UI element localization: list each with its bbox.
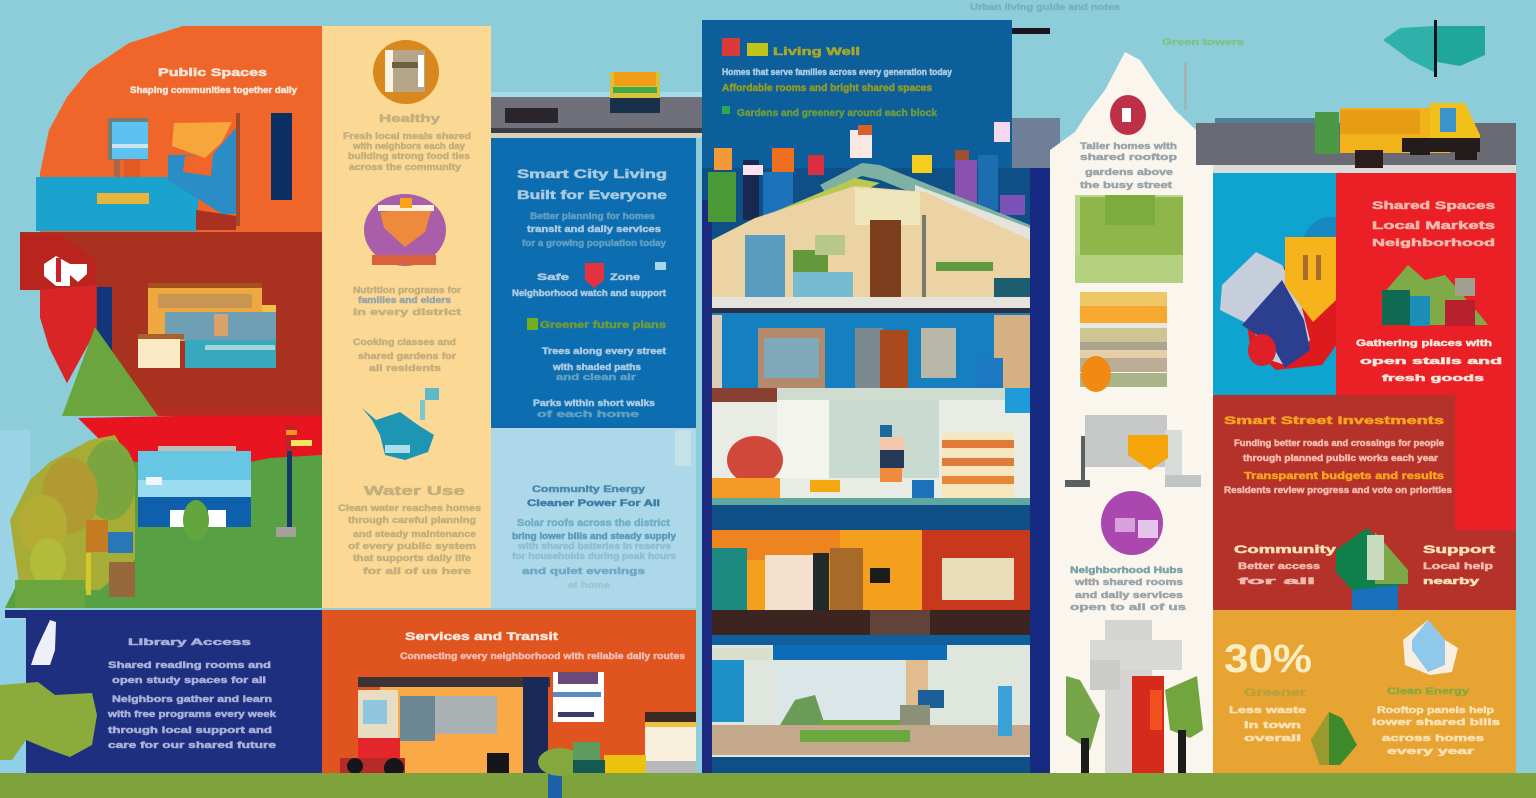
body text: Taller homes with [1080,141,1177,151]
body text: with shared rooms [1074,577,1183,587]
body text [1080,141,1178,190]
body text: open to all of us [1070,602,1186,612]
panel: blue middle [491,138,696,425]
label: left: Better access [1238,561,1320,571]
body text: through planned public works each year [1243,453,1439,463]
scene: garden room [712,635,1030,757]
stat number: 30% [1224,637,1312,681]
stat label: Less waste [1229,705,1306,715]
stat label [1229,687,1307,743]
body text: Trees along every street [542,346,666,356]
body text: with neighbors each day [352,141,465,151]
scene: blue room [712,313,1030,394]
antenna label [1162,37,1244,110]
body text [338,503,481,576]
panel: red middle left [20,232,322,416]
caption: families and elders [358,295,451,305]
body text: the busy street [1080,180,1172,190]
caption: Nutrition programs for [353,285,462,295]
panel: bright blue [1213,173,1362,395]
caption: Cooking classes and [353,337,456,347]
label: right: Support [1423,544,1496,556]
heading: Healthy [379,113,441,125]
body text: through careful planning [348,515,476,525]
body text [1224,438,1452,495]
label: right [1423,544,1496,586]
label: left: for all [1238,576,1315,586]
green highlight [527,318,667,331]
navy pillar [271,113,292,200]
body text: building strong food ties [348,151,470,161]
body text: open stalls and [1360,356,1502,366]
top note: Urban living guide and notes [970,2,1120,12]
body text: Parks within short walks [533,398,655,408]
tower with trees [1066,620,1203,773]
heading: Water Use [364,483,465,498]
body text: Clean Energy [1387,686,1469,696]
ground [0,773,1536,798]
icon: red pin row [512,262,666,298]
red car [340,738,405,778]
icon: purple badge [1101,491,1163,555]
body text: Transparent budgets and results [1244,471,1445,482]
stat label: in town [1244,720,1301,730]
panel: dark red [1213,395,1516,610]
body text: and daily services [1075,590,1183,600]
panel: center house tower [702,20,1050,773]
icon: laptop shield [1065,415,1201,487]
caption: shared gardens for [358,351,457,361]
panel: orange bottom [322,610,696,778]
panel: light blue: Cleaner Power For All [527,498,660,508]
green highlight: Greener future plans [540,320,667,331]
heading: Smart City Living [517,167,667,181]
panel: ochre stats [1213,610,1516,773]
body text [1356,338,1502,383]
panel: green field [5,327,322,608]
yellow marker [97,193,149,204]
icon: burger [610,72,660,113]
icon: white badge [44,256,87,286]
road and truck [1196,103,1516,173]
icon: red pin row: Safe [537,272,569,282]
body text: that supports daily life [353,553,471,563]
body text: with free programs every week [107,709,277,719]
body text: Solar roofs across the district [517,518,671,529]
green map [1075,195,1183,283]
panel: white tower column [1050,37,1244,773]
body text: bring lower bills and steady supply [512,531,676,541]
subheading: Connecting every neighborhood with reliable daily routes [400,651,685,661]
body text [512,518,676,590]
header notes [722,38,952,119]
plant [538,742,605,798]
storefront [358,677,550,773]
body text: at home [568,580,610,590]
navy pole [97,287,112,359]
green hill [62,327,158,416]
body text: of every public system [348,541,476,551]
heading: Services and Transit [405,631,558,643]
heading: Community Energy [532,484,645,494]
body text: across homes [1382,733,1484,743]
body text: for households during peak hours [512,551,676,561]
body text [107,660,277,750]
body text: Shared reading rooms and [108,660,271,670]
road: upper middle [491,72,702,138]
yellow sign [604,755,646,773]
caption [353,285,462,317]
body text: with shared batteries in reserve [517,541,671,551]
icon: orange drop [1081,356,1111,392]
stat label: overall [1244,733,1301,743]
body text [1070,565,1186,612]
icon: flag [1383,20,1485,77]
sail graphic [168,113,240,226]
body text: for a growing population today [522,238,666,248]
panel: orange top left [36,26,322,232]
body text: every year [1387,746,1475,756]
body text: fresh goods [1382,373,1484,383]
body text: across the community [349,162,461,172]
green shrub [0,682,97,760]
body text: Rooftop panels help [1377,705,1495,715]
body text: Residents review progress and vote on priorities [1224,485,1452,495]
body text: Better planning for homes [530,211,655,221]
caption: all residents [369,363,441,373]
stacked chart [1080,292,1167,387]
body text: Fresh local meals shared [343,131,471,141]
panel: bright red: Neighborhood [1372,238,1495,249]
kiosk [645,712,696,773]
heading: Public Spaces [158,67,267,79]
body text: Neighbors gather and learn [112,694,272,704]
icon: document badge [373,40,439,104]
panel: light blue [491,425,696,608]
icon: red pin row: Zone [610,272,640,282]
mascot icon [31,620,56,665]
heading: Shared Spaces [1372,200,1495,212]
body text: open study spaces for all [112,675,266,685]
body text: lower shared bills [1372,717,1500,727]
caption: in every district [353,307,461,317]
icon: green arrow house [1336,528,1408,610]
icon: red pin row: Neighborhood watch and support [512,288,666,298]
label: left: Community [1234,544,1337,556]
icon: red drop badge [1110,95,1146,135]
body text: shared rooftop [1080,152,1178,162]
icon: village [1382,265,1488,326]
icon: calendar [553,672,604,722]
heading: Smart Street Investments [1224,415,1444,427]
scene: kitchen [712,388,1030,505]
panel: bright red [1336,173,1516,530]
body text: and steady maintenance [353,529,476,539]
panel: bright red: Local Markets [1372,220,1495,232]
subheading: Shaping communities together daily [130,85,297,95]
signpost [276,425,312,537]
abstract droplet graphic [1220,217,1362,370]
body text: for all of us here [363,566,471,576]
header notes: Gardens and greenery around each block [737,108,937,119]
body text: Clean water reaches homes [338,503,481,513]
dark vehicle [487,753,509,773]
header notes: Affordable rooms and bright shared spaces [722,83,932,94]
antenna label: Green towers [1162,37,1244,47]
header notes: Living Well [773,46,860,58]
label: left [1234,544,1337,586]
icon: blue gem [1403,620,1458,675]
red banner [78,413,322,462]
tree cluster [10,435,136,608]
body text: Funding better roads and crossings for people [1234,438,1444,448]
building [138,283,276,368]
school building [138,446,251,540]
panel: cream column [322,26,491,608]
body text: with shaded paths [552,362,641,372]
panel: navy bottom left [0,610,322,773]
body text: and clean air [556,372,637,382]
scene: roof and living room [712,163,1030,313]
label: right: Local help [1423,561,1494,571]
icon: water tank [362,388,439,460]
body text [1372,686,1500,756]
body text [343,131,471,172]
label: right: nearby [1423,576,1479,586]
body text: Gathering places with [1356,338,1492,348]
panel: blue middle: Built for Everyone [517,188,667,202]
body text: and quiet evenings [522,566,645,576]
body text [533,346,666,419]
body text: of each home [537,409,639,419]
scene: living quarters [712,530,1030,640]
body text: gardens above [1085,167,1173,177]
body text: transit and daily services [527,224,661,234]
icon: purple bowl [364,194,446,266]
body text: Neighborhood Hubs [1070,565,1183,575]
icon: yellow truck [1315,103,1480,168]
icon: screen [108,118,148,177]
icon: leaf [1311,712,1357,765]
residents on roof [708,122,1025,222]
gray roof block behind tower [1012,118,1060,168]
heading: Library Access [128,637,251,647]
caption [353,337,457,373]
body text: care for our shared future [108,740,276,750]
body text [522,211,666,248]
header notes: Homes that serve families across every generation today [722,67,952,77]
body text: through local support and [108,725,272,735]
stat label: Greener [1244,687,1307,699]
